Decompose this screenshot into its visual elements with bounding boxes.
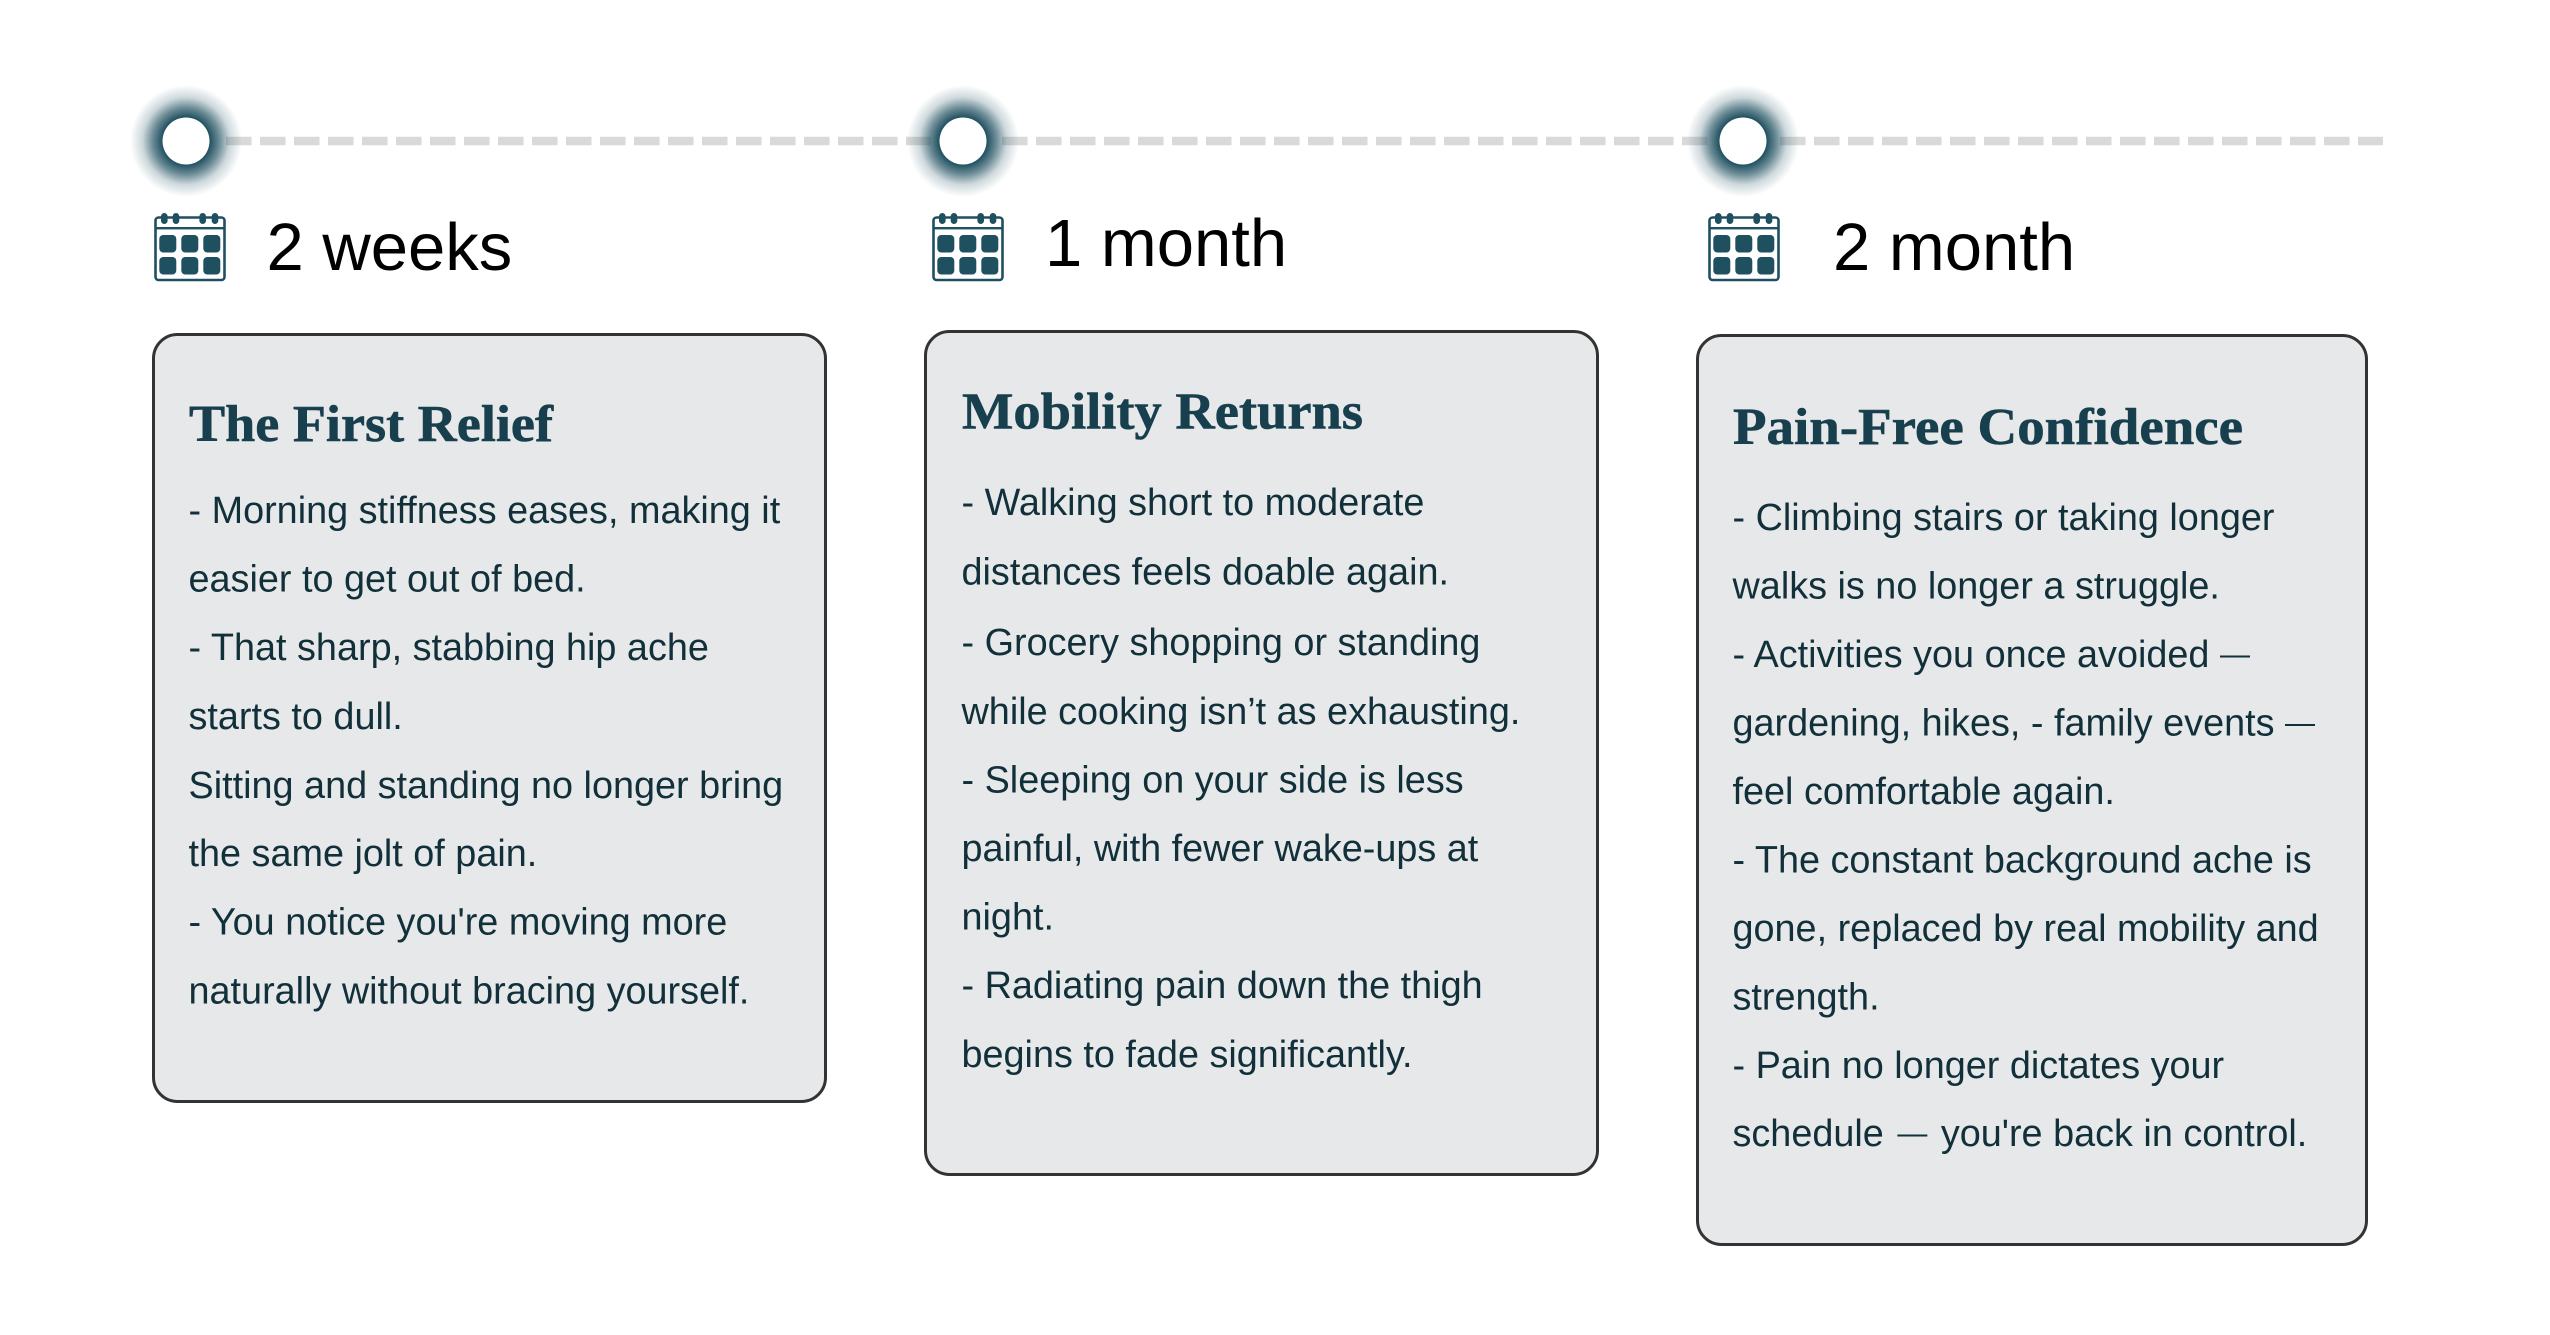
body text: Pain-Free Confidence (1732, 497, 2319, 1155)
body text: Pain-Free Confidence: gardening, hikes, - family events (1732, 702, 2275, 744)
timeline marker: 1 month (907, 85, 1019, 197)
body text: Pain-Free Confidence: gone, replaced by real mobility and (1732, 908, 2319, 950)
body text: Mobility Returns: while cooking isn’t as exhausting. (960, 691, 1520, 733)
panel: The First Relief (154, 334, 826, 1102)
body text: Mobility Returns: begins to fade significantly. (962, 1034, 1413, 1076)
body text: Mobility Returns: painful, with fewer wake-ups at (962, 828, 1479, 870)
timeline marker: 2 month (1687, 85, 1799, 197)
icon: calendar 1 month (934, 213, 1002, 280)
body text: Mobility Returns: - Radiating pain down the thigh (962, 965, 1483, 1007)
body text: Pain-Free Confidence: walks is no longer a struggle. (1732, 566, 2220, 608)
body text: The First Relief: - Morning stiffness eases, making it (188, 490, 781, 532)
body text: The First Relief: - You notice you're moving more (188, 902, 727, 944)
timeline (130, 85, 2383, 197)
body text: The First Relief: easier to get out of bed. (188, 558, 586, 600)
panel: Mobility Returns (926, 332, 1598, 1174)
body text: Pain-Free Confidence: schedule (1732, 1113, 1884, 1155)
body text: Pain-Free Confidence: feel comfortable again. (1732, 771, 2115, 813)
panel: Pain-Free Confidence (1698, 336, 2366, 1244)
body text: The First Relief: naturally without bracing yourself. (188, 970, 749, 1012)
body text: The First Relief: the same jolt of pain. (188, 833, 537, 875)
label: 2 weeks: 2 weeks (266, 210, 512, 285)
body text: Pain-Free Confidence: — (2285, 706, 2315, 740)
body text: Mobility Returns: distances feels doable again. (962, 552, 1449, 594)
heading: The First Relief: The First Relief (189, 396, 554, 453)
body text: Pain-Free Confidence: - Climbing stairs or taking longer (1732, 497, 2274, 539)
heading: Pain-Free Confidence: Pain-Free Confidence (1733, 399, 2243, 456)
body text: Pain-Free Confidence: - Activities you once avoided (1732, 634, 2209, 676)
body text: Mobility Returns: - Walking short to moderate (962, 482, 1424, 524)
body text: Mobility Returns: night. (962, 896, 1054, 938)
icon: calendar 2 month (1710, 213, 1778, 280)
body text: Mobility Returns: - Sleeping on your side is less (962, 760, 1464, 802)
body text: Pain-Free Confidence: - The constant background ache is (1732, 840, 2312, 882)
timeline marker: 2 weeks (130, 85, 242, 197)
body text: Pain-Free Confidence: — (2220, 638, 2250, 671)
body text: Pain-Free Confidence: — (1897, 1117, 1927, 1150)
body text: The First Relief: - That sharp, stabbing hip ache (188, 627, 709, 669)
body text: The First Relief (188, 490, 783, 1012)
body text: The First Relief: Sitting and standing no longer bring (188, 765, 783, 807)
heading: Mobility Returns: Mobility Returns (962, 384, 1363, 440)
label: 1 month: 1 month (1045, 206, 1287, 281)
label: 2 month: 2 month (1833, 210, 2075, 285)
body text: Mobility Returns (960, 482, 1520, 1076)
body text: Mobility Returns: - Grocery shopping or standing (962, 622, 1480, 664)
body text: Pain-Free Confidence: strength. (1732, 976, 1880, 1018)
icon: calendar 2 weeks (156, 213, 224, 280)
body text: Pain-Free Confidence: - Pain no longer dictates your (1732, 1045, 2224, 1087)
body text: Pain-Free Confidence: you're back in control. (1930, 1113, 2307, 1155)
body text: The First Relief: starts to dull. (188, 696, 403, 738)
